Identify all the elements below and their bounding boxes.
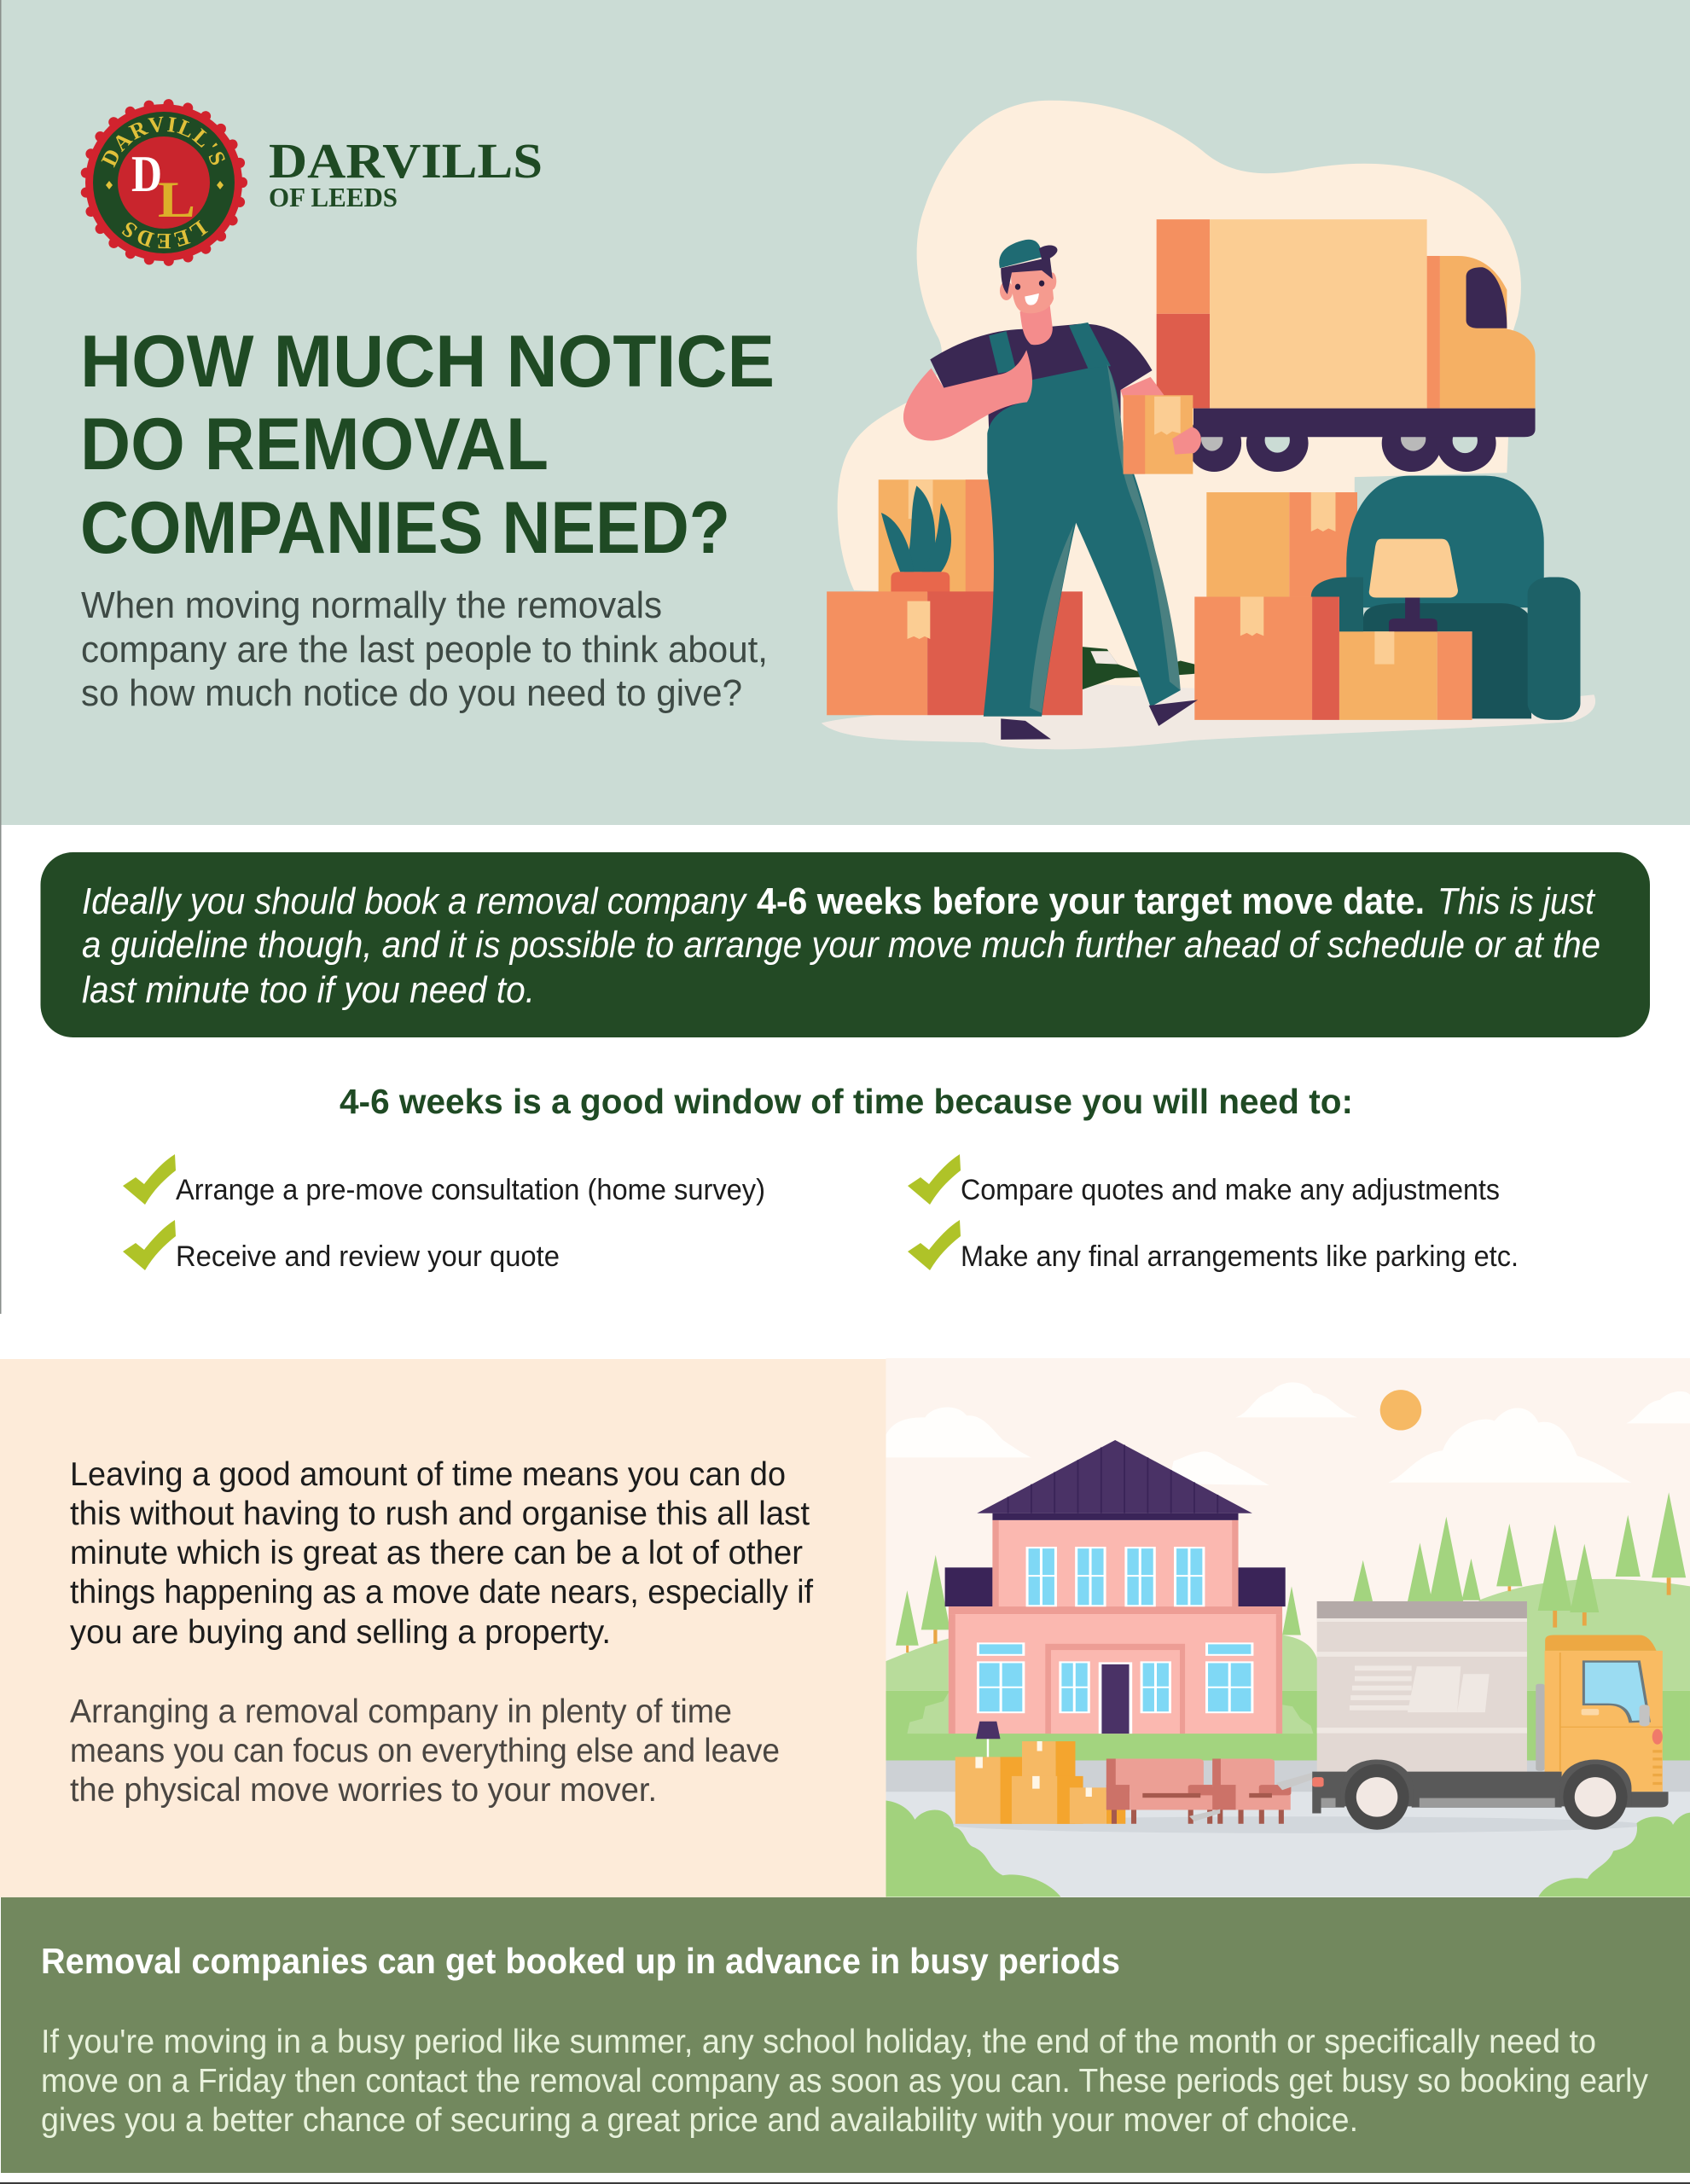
subtitle: company are the last people to think about, xyxy=(81,629,768,671)
text block: why leave time: Leaving a good amount of time means you can do xyxy=(70,1456,786,1493)
heading: checklist heading: 4-6 weeks is a good window of time because you will need to: xyxy=(340,1082,1353,1121)
icon: house xyxy=(945,1440,1286,1734)
icon: check mark 2 xyxy=(123,1220,176,1270)
logo: Darvill's of Leeds seal xyxy=(80,99,247,266)
brand name xyxy=(269,133,543,212)
callout: green recommendation banner: Ideally you should book a removal company xyxy=(82,880,748,922)
clouds and sun xyxy=(886,1382,1690,1485)
callout: green recommendation banner: last minute too if you need to. xyxy=(82,969,535,1011)
text block: why leave time: you are buying and selling a property. xyxy=(70,1614,611,1651)
text block: why leave time: things happening as a move date nears, especially if xyxy=(70,1574,813,1611)
bushes xyxy=(886,1800,1690,1897)
icon: truck xyxy=(1157,219,1536,472)
hills and trees xyxy=(886,1492,1690,1691)
brand name: OF LEEDS xyxy=(269,182,398,212)
item: compare quotes: Compare quotes and make any adjustments xyxy=(961,1174,1500,1206)
text block: why leave time: this without having to rush and organise this all last xyxy=(70,1496,810,1532)
title: HOW MUCH NOTICE xyxy=(80,321,775,403)
logo: Darvill's of Leeds seal: LEEDS xyxy=(121,220,208,249)
subtitle xyxy=(81,584,768,714)
text block: why leave time: minute which is great as there can be a lot of other xyxy=(70,1535,803,1571)
callout: green recommendation banner: 4-6 weeks before your target move date. xyxy=(757,880,1425,922)
panel: header xyxy=(0,0,1690,1314)
text block: busy periods advice: move on a Friday then contact the removal company as soon as you can. These periods get busy so booking early xyxy=(41,2063,1648,2100)
icon: check mark 1 xyxy=(123,1154,176,1205)
text block: plenty of time: Arranging a removal company in plenty of time xyxy=(70,1693,732,1730)
text block: why leave time xyxy=(70,1456,813,1651)
icon: check mark 3 xyxy=(908,1154,961,1205)
illustration: house and removal truck xyxy=(886,1358,1690,1897)
icon: boxes and armchair, right xyxy=(1194,476,1580,720)
subtitle: so how much notice do you need to give? xyxy=(81,672,742,714)
icon: stacked boxes and plant, left xyxy=(827,479,1083,715)
title xyxy=(80,321,775,569)
panel: peach text panel xyxy=(0,1359,887,1897)
logo: Darvill's of Leeds seal: L xyxy=(158,171,195,228)
callout: green recommendation banner xyxy=(41,852,1650,1037)
text block: busy periods advice: gives you a better chance of securing a great price and availability with your mover of choice. xyxy=(41,2102,1358,2139)
checklist xyxy=(123,1154,1519,1273)
icon: check mark 4 xyxy=(908,1220,961,1270)
heading: busy periods: Removal companies can get booked up in advance in busy periods xyxy=(41,1941,1120,1981)
icon: removal truck xyxy=(1189,1601,1669,1830)
icon: sofa and chair xyxy=(1106,1758,1291,1824)
panel: busy periods xyxy=(1,1897,1690,2173)
text block: plenty of time: the physical move worries to your mover. xyxy=(70,1772,657,1809)
subtitle: When moving normally the removals xyxy=(81,584,662,626)
text block: plenty of time xyxy=(70,1693,780,1809)
title: DO REMOVAL xyxy=(80,404,549,485)
logo: Darvill's of Leeds seal: D xyxy=(131,146,162,202)
text block: plenty of time: means you can focus on everything else and leave xyxy=(70,1733,780,1769)
item: final arrangements: Make any final arrangements like parking etc. xyxy=(961,1240,1519,1273)
text block: busy periods advice xyxy=(41,2024,1648,2139)
illustration: removal man with truck and boxes xyxy=(822,101,1595,749)
icon: removal man xyxy=(903,240,1201,740)
logo: Darvill's of Leeds seal: DARVILL'S xyxy=(101,116,225,167)
item: review quote: Receive and review your quote xyxy=(176,1240,560,1273)
title: COMPANIES NEED? xyxy=(80,487,730,569)
brand name: DARVILLS xyxy=(269,133,543,189)
item: home survey: Arrange a pre-move consultation (home survey) xyxy=(176,1174,765,1206)
text block: busy periods advice: If you're moving in a busy period like summer, any school holiday, the end of the month or specifically need to xyxy=(41,2024,1596,2060)
callout: green recommendation banner: This is just xyxy=(1437,880,1596,922)
icon: lamp and boxes xyxy=(955,1722,1125,1824)
